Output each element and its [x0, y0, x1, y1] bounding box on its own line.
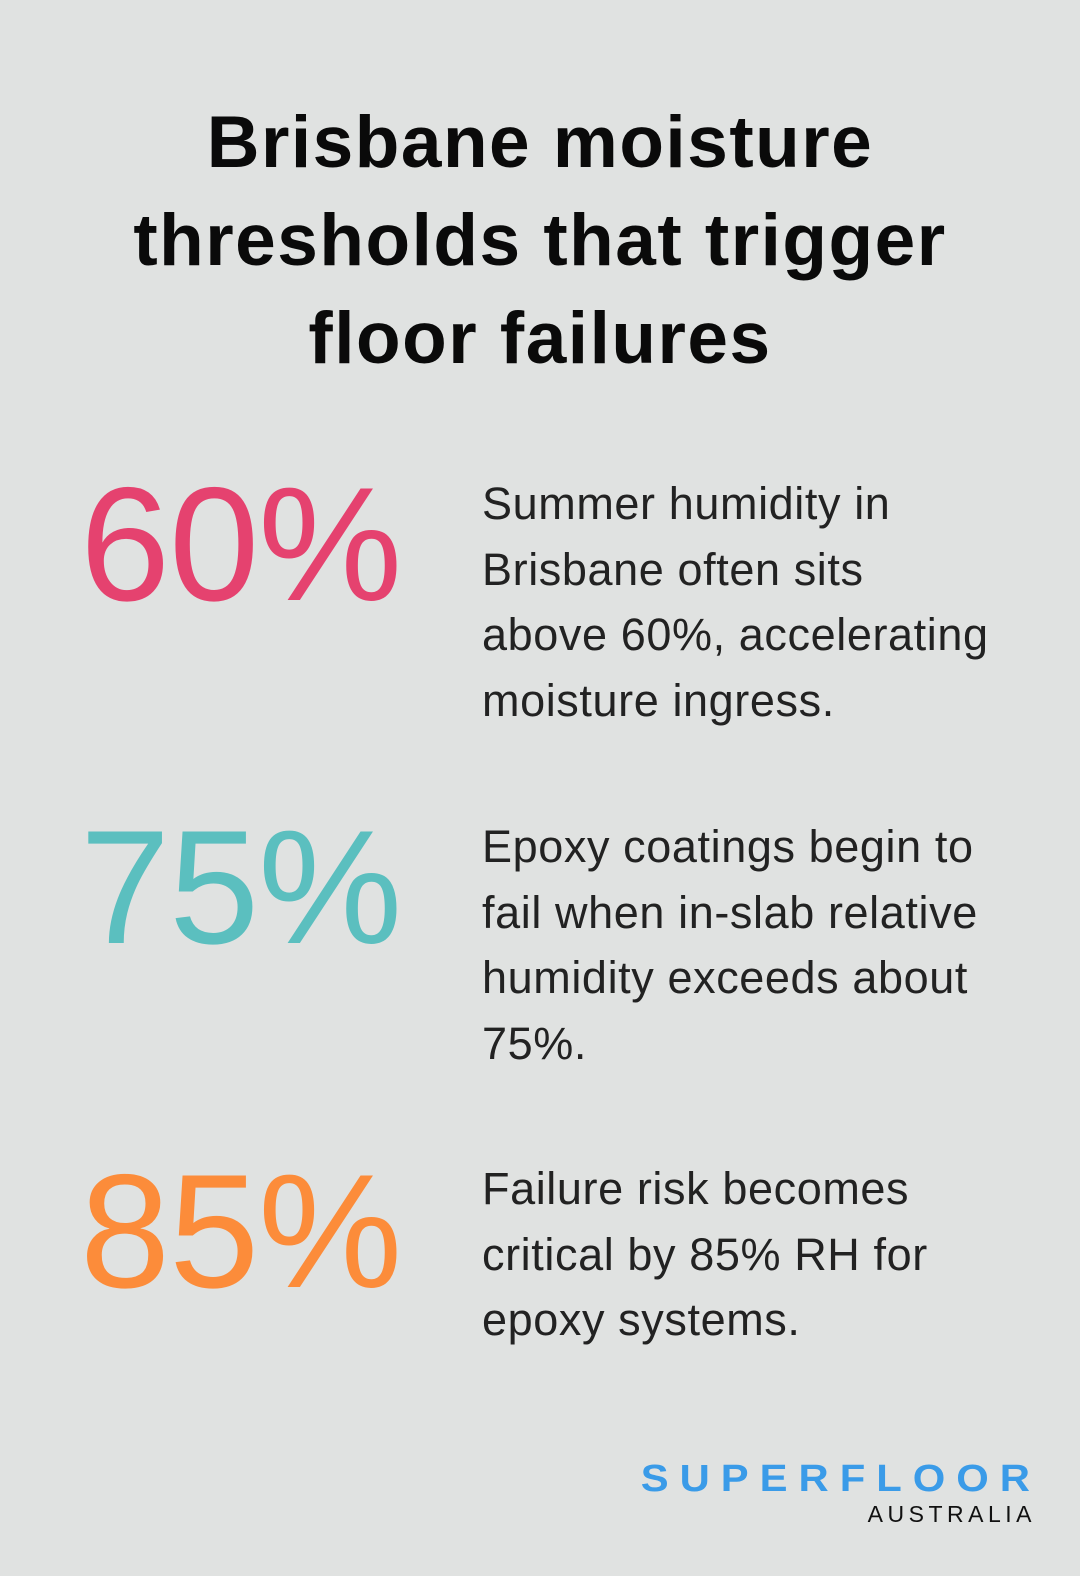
title: thresholds that trigger — [133, 200, 947, 281]
title — [133, 102, 947, 379]
text: 75% — [482, 821, 978, 1068]
text: 60%: above 60%, accelerating — [482, 609, 989, 660]
text: 85%: epoxy systems. — [482, 1294, 800, 1345]
text: 60%: Summer humidity in — [482, 478, 890, 529]
text: 85%: critical by 85% RH for — [482, 1228, 928, 1280]
title: Brisbane moisture — [207, 102, 873, 183]
text: 75%: Epoxy coatings begin to — [482, 821, 974, 872]
text: 60%: moisture ingress. — [482, 674, 835, 726]
logo — [641, 1458, 1041, 1527]
text: 60% — [482, 478, 989, 726]
text: 75%: humidity exceeds about — [482, 952, 968, 1003]
text: 85% — [482, 1163, 928, 1345]
stat: 85%: 85% — [80, 1141, 401, 1322]
text: 60%: Brisbane often sits — [482, 544, 864, 594]
stat: 60%: 60% — [80, 454, 401, 635]
text: 75%: 75%. — [482, 1018, 587, 1068]
title: floor failures — [308, 298, 772, 379]
stat: 75%: 75% — [80, 797, 401, 978]
logo: SUPERFLOOR — [641, 1458, 1041, 1500]
text: 85%: Failure risk becomes — [482, 1163, 909, 1214]
text: 75%: fail when in-slab relative — [482, 886, 978, 938]
logo: AUSTRALIA — [868, 1501, 1036, 1527]
